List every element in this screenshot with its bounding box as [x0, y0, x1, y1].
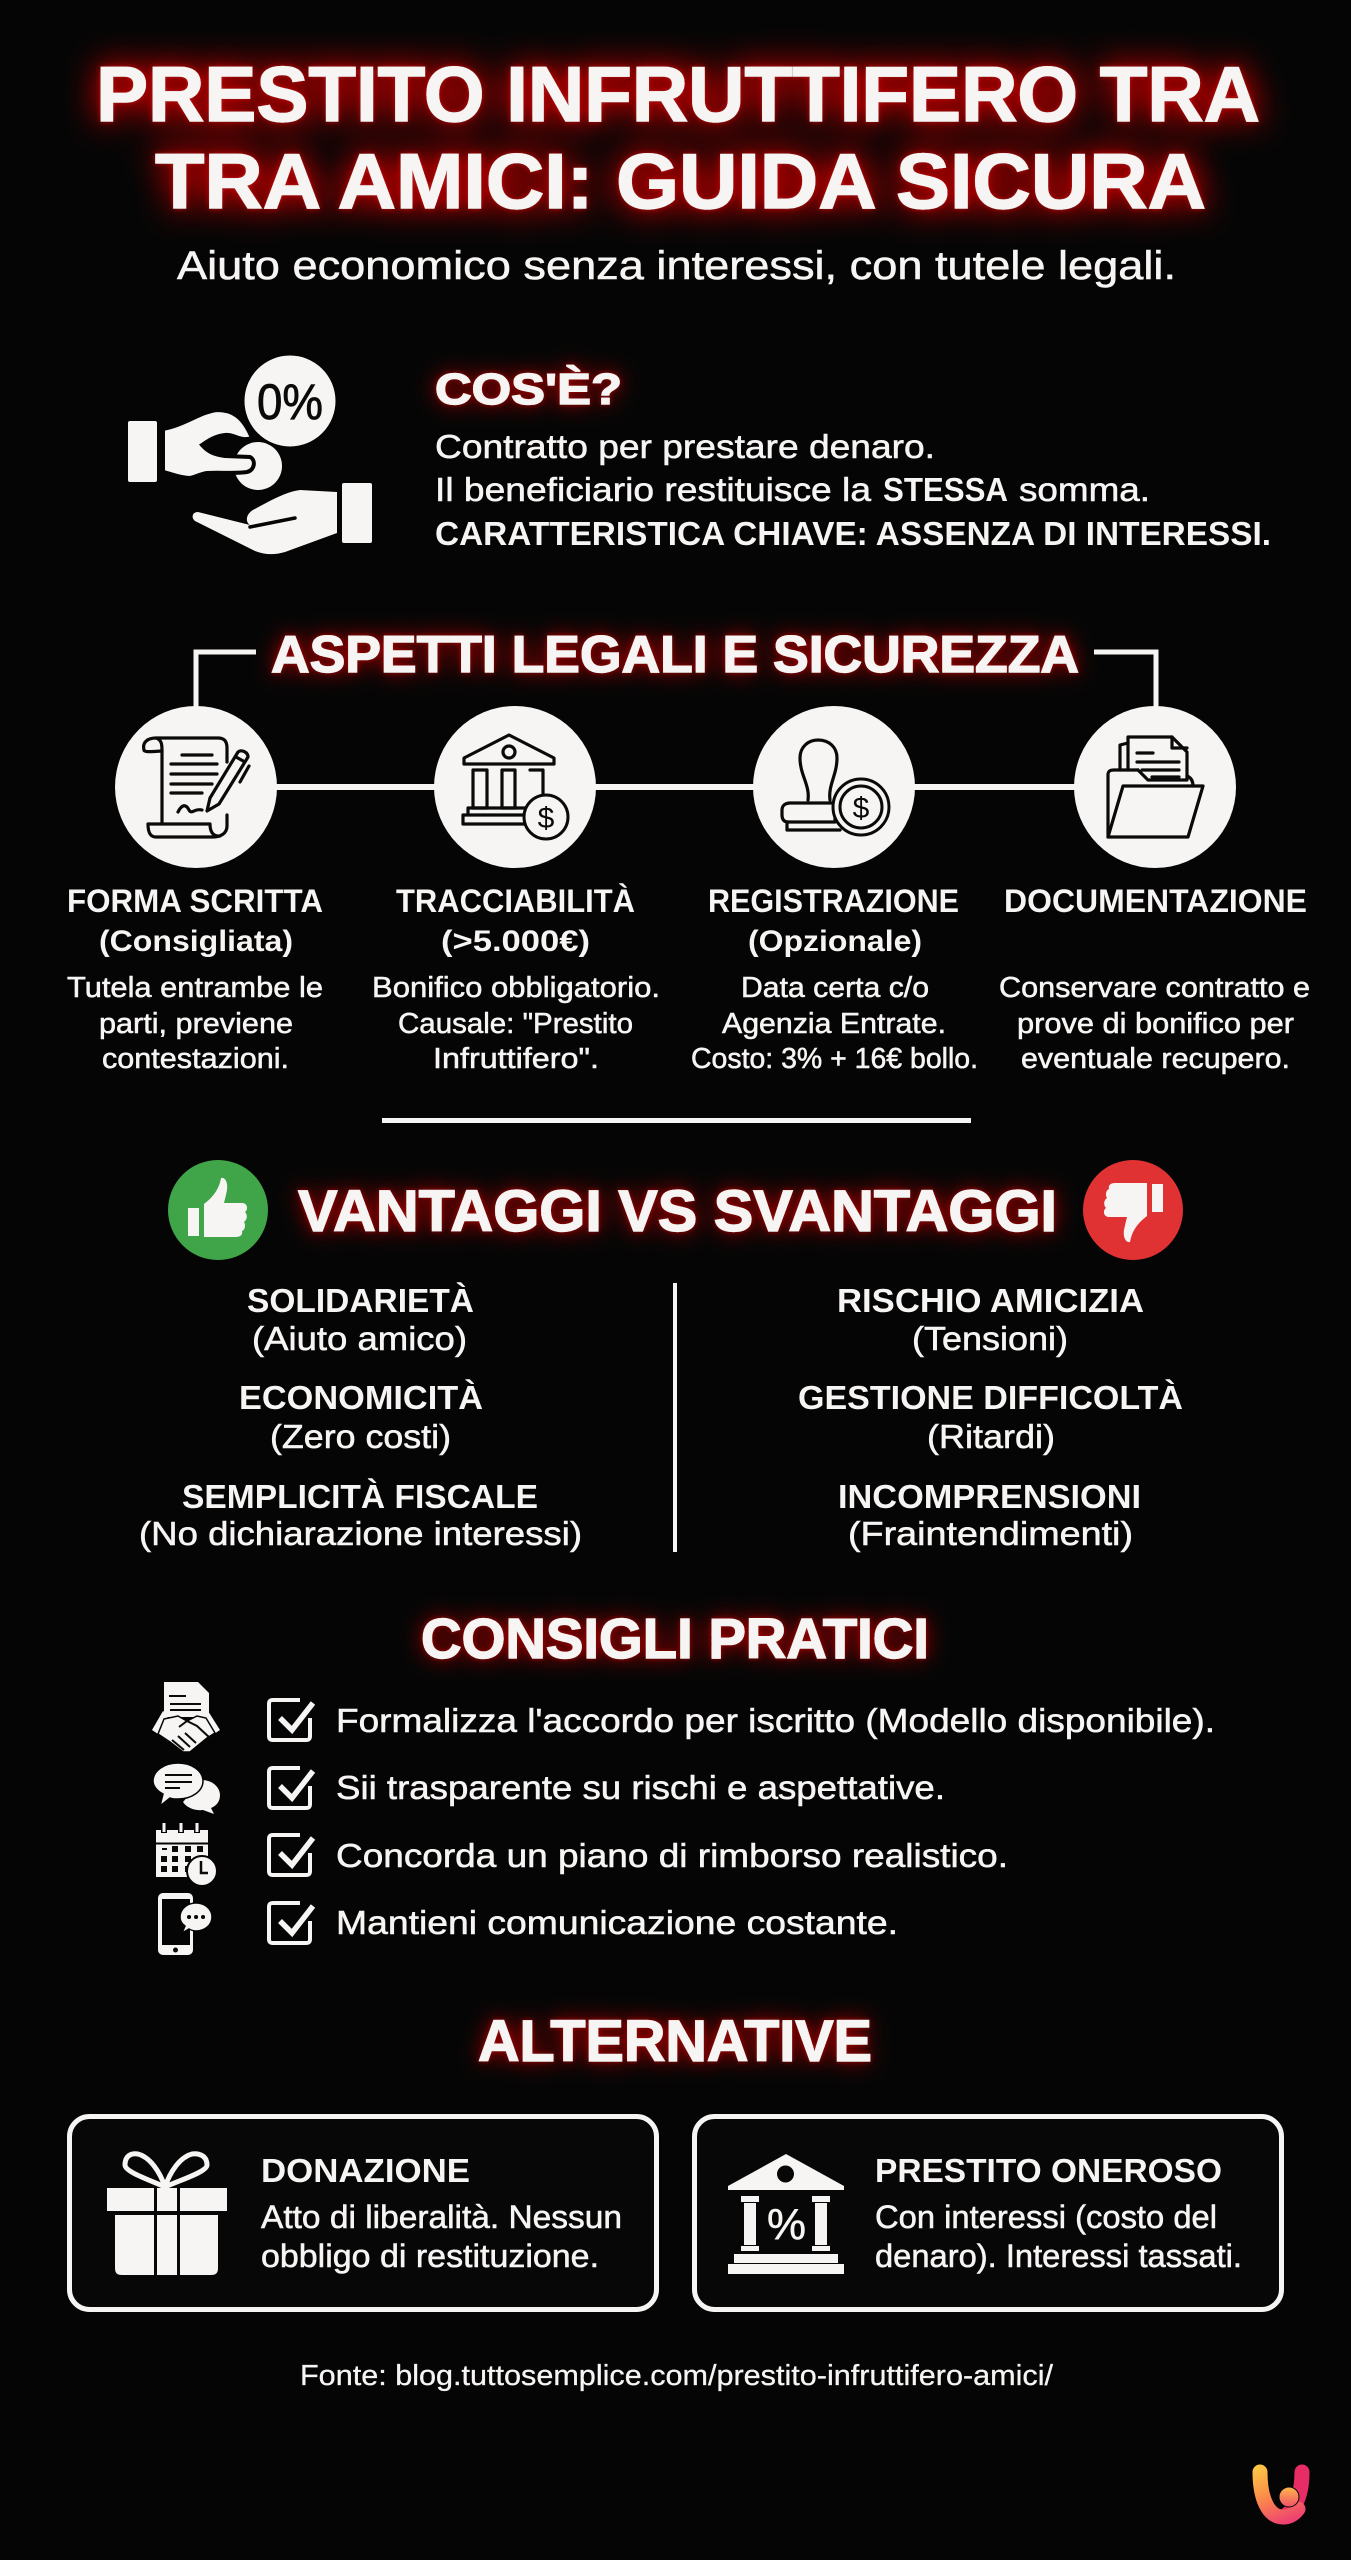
- column: forma scritta: contestazioni.: [102, 1043, 289, 1075]
- icon: hands exchanging 0% loan: 0%: [257, 374, 323, 430]
- icon: hands exchanging 0% loan: [128, 354, 372, 554]
- list: svantaggi: [798, 1282, 1183, 1552]
- column: registrazione: (Opzionale): [748, 925, 922, 958]
- column: tracciabilità: TRACCIABILITÀ: [396, 883, 635, 919]
- icon: folder with documents: [1074, 706, 1236, 868]
- list: vantaggi: SOLIDARIETÀ: [247, 1282, 474, 1319]
- checkbox: [269, 1768, 313, 1808]
- column: documentazione: Conservare contratto e: [999, 972, 1310, 1004]
- column: forma scritta: Tutela entrambe le: [67, 972, 323, 1004]
- column: documentazione: eventuale recupero.: [1021, 1043, 1290, 1075]
- column: documentazione: [999, 883, 1310, 1075]
- tip 3: rimborso: [156, 1823, 1008, 1886]
- column: forma scritta: (Consigliata): [99, 925, 293, 958]
- checkbox: [269, 1903, 313, 1943]
- subtitle: Aiuto economico senza interessi, con tutele legali.: [177, 244, 1176, 288]
- heading: cos'è: COS'È?: [435, 364, 622, 414]
- list: vantaggi: ECONOMICITÀ: [239, 1379, 483, 1416]
- icon: bank with percent: %: [767, 2200, 806, 2249]
- list: svantaggi: (Fraintendimenti): [848, 1515, 1133, 1552]
- icon: contract and handshake: [152, 1682, 220, 1752]
- icon: thumbs down: [1083, 1160, 1183, 1260]
- column: registrazione: Agenzia Entrate.: [722, 1008, 946, 1040]
- text: definition: Contratto per prestare denaro.: [435, 428, 935, 465]
- checkbox: [269, 1700, 313, 1740]
- icon: speech bubbles: [153, 1763, 220, 1814]
- list: vantaggi: [139, 1282, 582, 1552]
- list: vantaggi: (No dichiarazione interessi): [139, 1515, 582, 1552]
- panel: vantaggi vs svantaggi: [139, 1160, 1183, 1552]
- icon: calendar and clock: [156, 1823, 217, 1886]
- column: documentazione: DOCUMENTAZIONE: [1004, 883, 1307, 919]
- heading: alternative: ALTERNATIVE: [478, 2009, 872, 2074]
- card: prestito oneroso: denaro). Interessi tassati.: [875, 2238, 1242, 2274]
- checkbox: [269, 1835, 313, 1875]
- card: prestito oneroso: Con interessi (costo del: [875, 2199, 1217, 2235]
- text: Mantieni comunicazione costante.: [336, 1904, 898, 1941]
- source line: Fonte: blog.tuttosemplice.com/prestito-infruttifero-amici/: [300, 2360, 1054, 2392]
- list: svantaggi: (Ritardi): [927, 1418, 1055, 1455]
- heading: aspetti legali: ASPETTI LEGALI E SICUREZZA: [271, 626, 1079, 684]
- column: registrazione: [691, 883, 978, 1075]
- column: tracciabilità: [372, 883, 660, 1075]
- icon: bank with percent: [728, 2154, 844, 2274]
- card: donazione: Atto di liberalità. Nessun: [261, 2199, 622, 2235]
- text: PRESTITO ONEROSO: [875, 2152, 1222, 2189]
- text: Sii trasparente su rischi e aspettative.: [336, 1769, 945, 1806]
- heading: consigli pratici: CONSIGLI PRATICI: [421, 1607, 929, 1671]
- column: registrazione: Costo: 3% + 16€ bollo.: [691, 1043, 978, 1075]
- column: tracciabilità: Infruttifero".: [433, 1043, 599, 1075]
- panel: alternative: [70, 2009, 1282, 2310]
- panel: consigli pratici: [152, 1607, 1215, 1955]
- title: [96, 50, 1260, 225]
- column: tracciabilità: Bonifico obbligatorio.: [372, 972, 660, 1004]
- list: svantaggi: RISCHIO AMICIZIA: [837, 1282, 1144, 1319]
- card: donazione: obbligo di restituzione.: [261, 2238, 599, 2274]
- icon: stamp with coin: $: [853, 792, 870, 825]
- column: forma scritta: FORMA SCRITTA: [67, 883, 323, 919]
- column: documentazione: prove di bonifico per: [1017, 1008, 1294, 1040]
- icon: bank with coin: [434, 706, 596, 868]
- column: forma scritta: [67, 883, 323, 1075]
- list: vantaggi: (Zero costi): [270, 1418, 451, 1455]
- column: tracciabilità: (>5.000€): [441, 925, 590, 958]
- logo: [1260, 2472, 1302, 2517]
- icon: thumbs up: [168, 1160, 268, 1260]
- list: svantaggi: (Tensioni): [912, 1320, 1068, 1357]
- card: donazione: [70, 2116, 656, 2310]
- title: TRA AMICI: GUIDA SICURA: [155, 137, 1206, 225]
- list: svantaggi: INCOMPRENSIONI: [838, 1478, 1141, 1515]
- list: vantaggi: (Aiuto amico): [252, 1320, 467, 1357]
- column: forma scritta: parti, previene: [99, 1008, 293, 1040]
- tip 2: trasparenza: [153, 1763, 945, 1814]
- heading: vantaggi vs svantaggi: VANTAGGI VS SVANTAGGI: [298, 1179, 1057, 1244]
- text: definition: Il beneficiario restituisce la: [435, 471, 872, 508]
- icon: phone with chat bubble: [158, 1893, 212, 1955]
- column: registrazione: REGISTRAZIONE: [708, 883, 959, 919]
- panel: cos'è: [128, 354, 1271, 554]
- column: registrazione: Data certa c/o: [741, 972, 929, 1004]
- text: Concorda un piano di rimborso realistico.: [336, 1837, 1008, 1874]
- list: svantaggi: GESTIONE DIFFICOLTÀ: [798, 1379, 1183, 1416]
- tip 1: formalizza: [152, 1682, 1215, 1752]
- icon: stamp with coin: [753, 706, 915, 868]
- card: prestito oneroso: [694, 2116, 1282, 2310]
- icon: gift: [107, 2154, 227, 2275]
- text: definition: somma.: [1019, 471, 1150, 508]
- column: tracciabilità: Causale: "Prestito: [398, 1008, 633, 1040]
- text: Formalizza l'accordo per iscritto (Modello disponibile).: [336, 1702, 1215, 1739]
- tip 4: comunicazione: [158, 1893, 898, 1955]
- title: PRESTITO INFRUTTIFERO TRA: [96, 50, 1260, 138]
- list: vantaggi: SEMPLICITÀ FISCALE: [182, 1478, 538, 1515]
- icon: written contract: [115, 706, 277, 868]
- text: definition: CARATTERISTICA CHIAVE: ASSENZA DI INTERESSI.: [435, 515, 1271, 552]
- text: DONAZIONE: [261, 2152, 470, 2189]
- panel: aspetti legali: [67, 626, 1310, 1075]
- icon: bank with coin: $: [538, 802, 555, 835]
- text: definition: STESSA: [883, 471, 1008, 508]
- text: definition: [435, 428, 1271, 552]
